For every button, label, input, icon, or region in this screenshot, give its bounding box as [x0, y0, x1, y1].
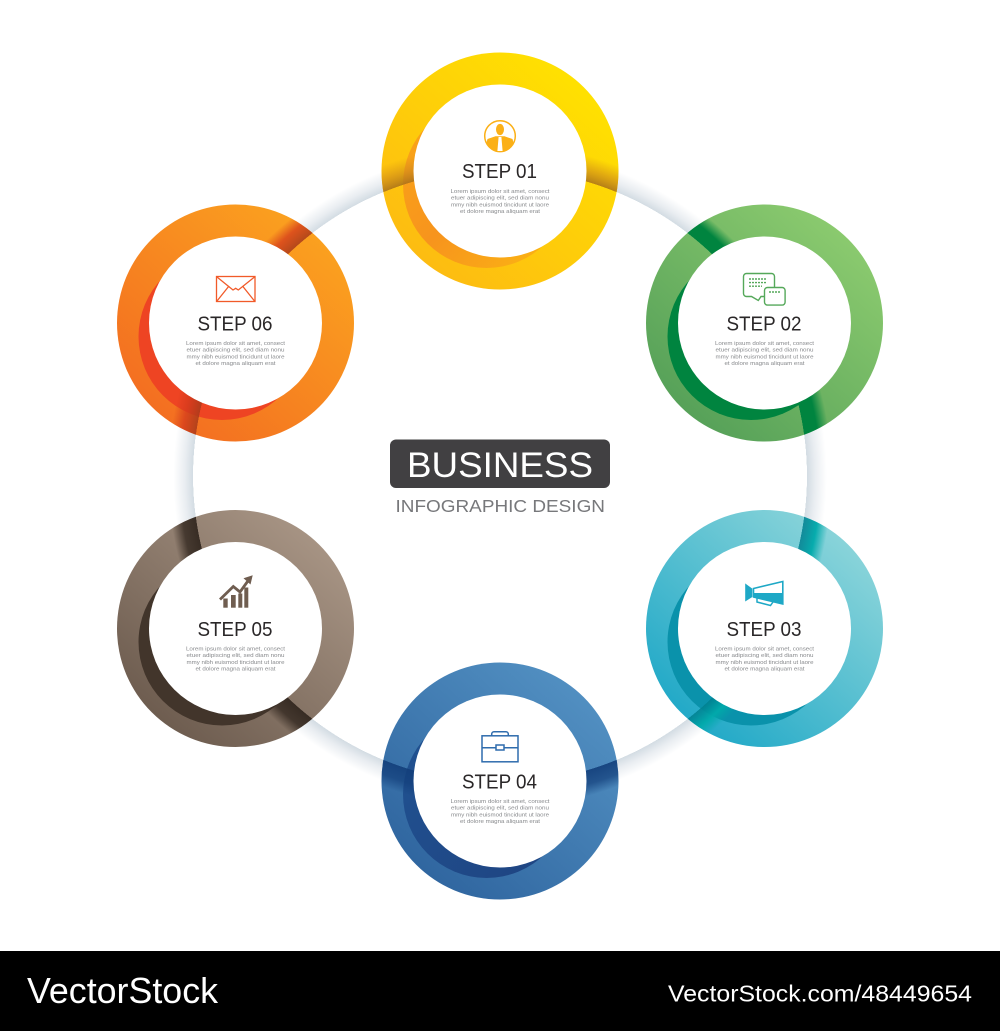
panel: step 05 — [117, 510, 354, 747]
footer bar: VectorStock.com/48449654 — [668, 980, 972, 1006]
footer bar — [0, 951, 1000, 1031]
subtitle: INFOGRAPHIC DESIGN — [396, 496, 605, 516]
text block: step 04: Lorem ipsum dolor sit amet, consect — [450, 799, 550, 805]
ring: brown — [117, 510, 354, 747]
heading: step 05: STEP 05 — [198, 619, 272, 641]
text block: step 02 — [715, 341, 814, 367]
heading: step 06: STEP 06 — [198, 314, 272, 336]
ring: orange — [117, 204, 354, 442]
text block: step 01: mmy nibh euismod tincidunt ut laore — [451, 202, 549, 208]
title: BUSINESS — [407, 445, 593, 485]
text block: step 05: Lorem ipsum dolor sit amet, consect — [186, 646, 285, 652]
text block: step 06: Lorem ipsum dolor sit amet, consect — [186, 341, 285, 347]
heading: step 04: STEP 04 — [462, 772, 537, 794]
text block: step 06: etuer adipiscing elit, sed diam nonu — [186, 348, 284, 354]
panel: step 02 — [646, 204, 883, 442]
ring: yellow — [382, 52, 618, 290]
heading: step 01: STEP 01 — [462, 161, 537, 183]
text block: step 03: Lorem ipsum dolor sit amet, consect — [715, 646, 814, 652]
central ring shadow — [170, 146, 830, 806]
text block: step 06: et dolore magna aliquam erat — [196, 361, 276, 367]
panel: step 06 — [117, 204, 354, 442]
text block: step 03: et dolore magna aliquam erat — [724, 667, 805, 673]
text block: step 05 — [186, 646, 285, 673]
text block: step 03 — [715, 646, 814, 673]
text block: step 04 — [450, 799, 550, 825]
text block: step 04: mmy nibh euismod tincidunt ut laore — [451, 812, 549, 818]
text block: step 02: et dolore magna aliquam erat — [724, 361, 805, 367]
text block: step 04: etuer adipiscing elit, sed diam nonu — [451, 806, 549, 812]
text block: step 06: mmy nibh euismod tincidunt ut laore — [186, 354, 284, 360]
ring: blue — [382, 662, 618, 900]
text block: step 02: Lorem ipsum dolor sit amet, consect — [715, 341, 814, 347]
text block: step 01: et dolore magna aliquam erat — [460, 209, 540, 215]
text block: step 06 — [186, 341, 285, 367]
ring: teal — [646, 510, 883, 747]
text block: step 04: et dolore magna aliquam erat — [460, 819, 540, 825]
footer bar: VectorStock — [27, 970, 219, 1011]
icon: megaphone — [746, 582, 783, 606]
icon: briefcase — [482, 732, 518, 762]
icon: speech bubbles — [744, 274, 785, 305]
heading: step 03: STEP 03 — [726, 619, 802, 641]
ring: green — [646, 204, 883, 442]
text block: step 01: etuer adipiscing elit, sed diam nonu — [451, 196, 549, 202]
text block: step 05: et dolore magna aliquam erat — [196, 667, 276, 673]
text block: step 05: etuer adipiscing elit, sed diam nonu — [186, 653, 284, 659]
panel: step 01 — [382, 52, 618, 290]
text block: step 02: mmy nibh euismod tincidunt ut laore — [716, 354, 814, 360]
icon: businessman — [485, 121, 515, 152]
title — [390, 440, 610, 488]
heading: step 02: STEP 02 — [726, 314, 802, 336]
text block: step 03: mmy nibh euismod tincidunt ut laore — [716, 660, 814, 666]
text block: step 05: mmy nibh euismod tincidunt ut laore — [186, 660, 284, 666]
icon: envelope — [216, 276, 255, 302]
text block: step 01: Lorem ipsum dolor sit amet, consect — [450, 189, 550, 195]
text block: step 03: etuer adipiscing elit, sed diam nonu — [716, 653, 814, 659]
text block: step 01 — [450, 189, 550, 215]
text block: step 02: etuer adipiscing elit, sed diam nonu — [716, 348, 814, 354]
panel: step 04 — [382, 662, 618, 900]
panel: step 03 — [646, 510, 883, 747]
icon: growth chart — [220, 575, 253, 608]
